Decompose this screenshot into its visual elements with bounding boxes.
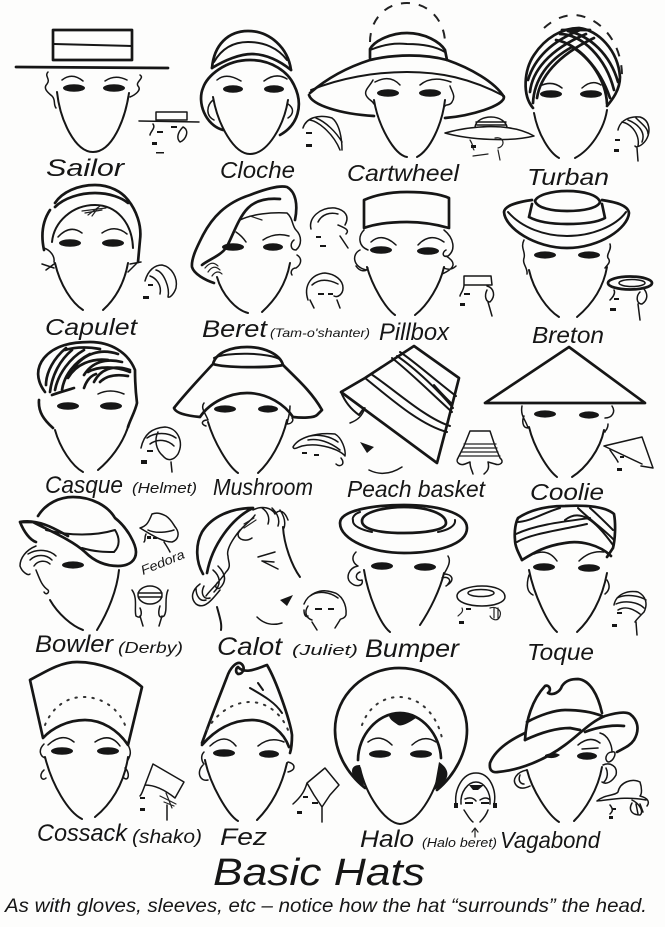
- face: cossack: [40, 738, 130, 819]
- hat: beret: [192, 186, 296, 283]
- face: sailor: [45, 72, 141, 152]
- hair: bowler: [20, 546, 56, 594]
- panel: mushroom: [174, 347, 345, 500]
- label: Toque: Toque: [527, 639, 594, 665]
- face: bowler: [50, 561, 119, 630]
- label: Breton: Breton: [532, 322, 604, 348]
- label: Fedora: Fedora: [139, 547, 187, 578]
- panel: beret: [192, 186, 370, 343]
- face: bumper: [348, 552, 452, 632]
- label: Fez: Fez: [220, 824, 267, 851]
- label: Bowler: Bowler: [35, 631, 114, 658]
- face profile: calot: [217, 527, 300, 630]
- panel: halo: [335, 668, 497, 853]
- hair: calot: [193, 507, 288, 606]
- small beret profile, back: [307, 273, 343, 308]
- small turban profile: [614, 117, 649, 161]
- small coolie profile: [604, 437, 653, 471]
- label: Casque: Casque: [45, 472, 123, 499]
- hat: sailor: [16, 30, 168, 68]
- label: Cossack: Cossack: [37, 820, 129, 847]
- panel: casque: [38, 342, 197, 499]
- panel: toque: [515, 506, 646, 665]
- face: capulet: [42, 229, 141, 310]
- panel: bumper: [340, 505, 505, 663]
- hat: turban: [526, 28, 620, 108]
- label: Vagabond: Vagabond: [500, 827, 601, 853]
- panel: bowler: [20, 497, 187, 658]
- face: pillbox: [355, 230, 456, 315]
- arrow to small halo: [472, 828, 478, 837]
- panel: sailor: [16, 30, 199, 182]
- label: Beret: Beret: [202, 316, 268, 343]
- face: peach basket: [350, 408, 402, 473]
- face: cartwheel: [366, 79, 454, 157]
- label: Halo beret: (Halo beret): [422, 835, 497, 850]
- hat: calot: [197, 508, 253, 574]
- label: Halo: Halo: [360, 826, 414, 853]
- hair: halo: [352, 712, 447, 790]
- small cartwheel profile: [445, 117, 534, 160]
- label: Sailor: Sailor: [46, 155, 125, 182]
- panel: cossack: [30, 662, 202, 848]
- face: breton: [523, 240, 610, 317]
- small cossack profile: [140, 764, 184, 820]
- small mushroom profile: [293, 434, 345, 466]
- panel: pillbox: [355, 192, 494, 346]
- hat: capulet: [42, 185, 140, 262]
- face: coolie: [522, 406, 614, 477]
- hair tuft: capulet: [82, 206, 106, 216]
- caption: As with gloves, sleeves, etc – notice how the hat “surrounds” the head.: [4, 896, 647, 917]
- hat: coolie: [485, 347, 645, 403]
- label: Tam-o'shanter: (Tam-o'shanter): [270, 326, 370, 340]
- small pillbox profile: [460, 276, 494, 316]
- hat: cossack: [30, 662, 142, 745]
- label: Cartwheel: Cartwheel: [347, 160, 460, 186]
- face: fez: [199, 739, 294, 821]
- face: casque: [55, 391, 128, 472]
- panel: capulet: [42, 185, 176, 340]
- label: Derby: (Derby): [118, 640, 183, 657]
- label: Bumper: Bumper: [365, 635, 461, 663]
- panel: cloche: [201, 31, 342, 183]
- hair: vagabond: [514, 733, 616, 788]
- dashed head outline: turban: [544, 15, 622, 76]
- small sailor profile: [139, 112, 199, 154]
- hat: cartwheel: [309, 3, 504, 118]
- label: Pillbox: Pillbox: [379, 319, 450, 346]
- small bumper profile: [457, 586, 505, 624]
- label: Juliet: (Juliet): [292, 642, 358, 659]
- label: Coolie: Coolie: [530, 479, 604, 505]
- small cloche profile: [303, 116, 342, 150]
- small casque profile: [141, 427, 180, 472]
- panel: fez: [199, 663, 339, 851]
- hat: vagabond: [490, 679, 637, 772]
- panel: cartwheel: [309, 3, 534, 186]
- hat: toque: [515, 506, 615, 560]
- small calot front: [304, 591, 346, 630]
- label: Helmet: (Helmet): [132, 480, 197, 497]
- label: Capulet: Capulet: [45, 314, 139, 340]
- hat: breton: [504, 191, 629, 248]
- face: vagabond: [527, 739, 602, 822]
- small fez profile: [293, 768, 339, 822]
- panel: peach basket: [341, 346, 502, 502]
- hat: mushroom: [174, 347, 322, 418]
- face: cloche: [208, 76, 292, 154]
- small peach basket front: [457, 431, 502, 474]
- hat: peach basket: [341, 346, 459, 463]
- small bowler back view: [132, 586, 168, 626]
- face: toque: [527, 552, 609, 632]
- hat: bowler: [20, 497, 136, 566]
- small fedora profile: [140, 513, 178, 552]
- panel: breton: [504, 191, 652, 348]
- face: beret: [217, 232, 290, 313]
- hair: beret: [205, 213, 301, 276]
- small toque profile: [612, 592, 646, 635]
- label: Mushroom: Mushroom: [213, 474, 313, 500]
- face: mushroom: [202, 403, 293, 473]
- small breton profile: [608, 276, 652, 320]
- label: Calot: Calot: [217, 633, 283, 661]
- hat: fez: [202, 663, 292, 753]
- small beret profile, front: [311, 208, 348, 248]
- small vagabond profile: [597, 780, 648, 819]
- hat: pillbox: [364, 192, 449, 228]
- panel: turban: [526, 15, 649, 190]
- hat: halo: [335, 668, 467, 790]
- label: shako: (shako): [132, 827, 202, 848]
- small halo front: [454, 773, 497, 822]
- hat: casque: [38, 342, 137, 428]
- title: Basic Hats: [213, 852, 425, 894]
- panel: coolie: [485, 347, 653, 505]
- hat: bumper: [340, 505, 467, 553]
- face: halo: [360, 738, 441, 824]
- label: Peach basket: Peach basket: [347, 476, 487, 502]
- panel: vagabond: [490, 679, 648, 853]
- face: turban: [534, 83, 607, 158]
- panel: calot: [193, 507, 358, 661]
- small capulet profile: [143, 265, 176, 299]
- hat: cloche: [201, 31, 299, 135]
- label: Turban: Turban: [527, 164, 609, 190]
- label: Cloche: Cloche: [220, 157, 295, 183]
